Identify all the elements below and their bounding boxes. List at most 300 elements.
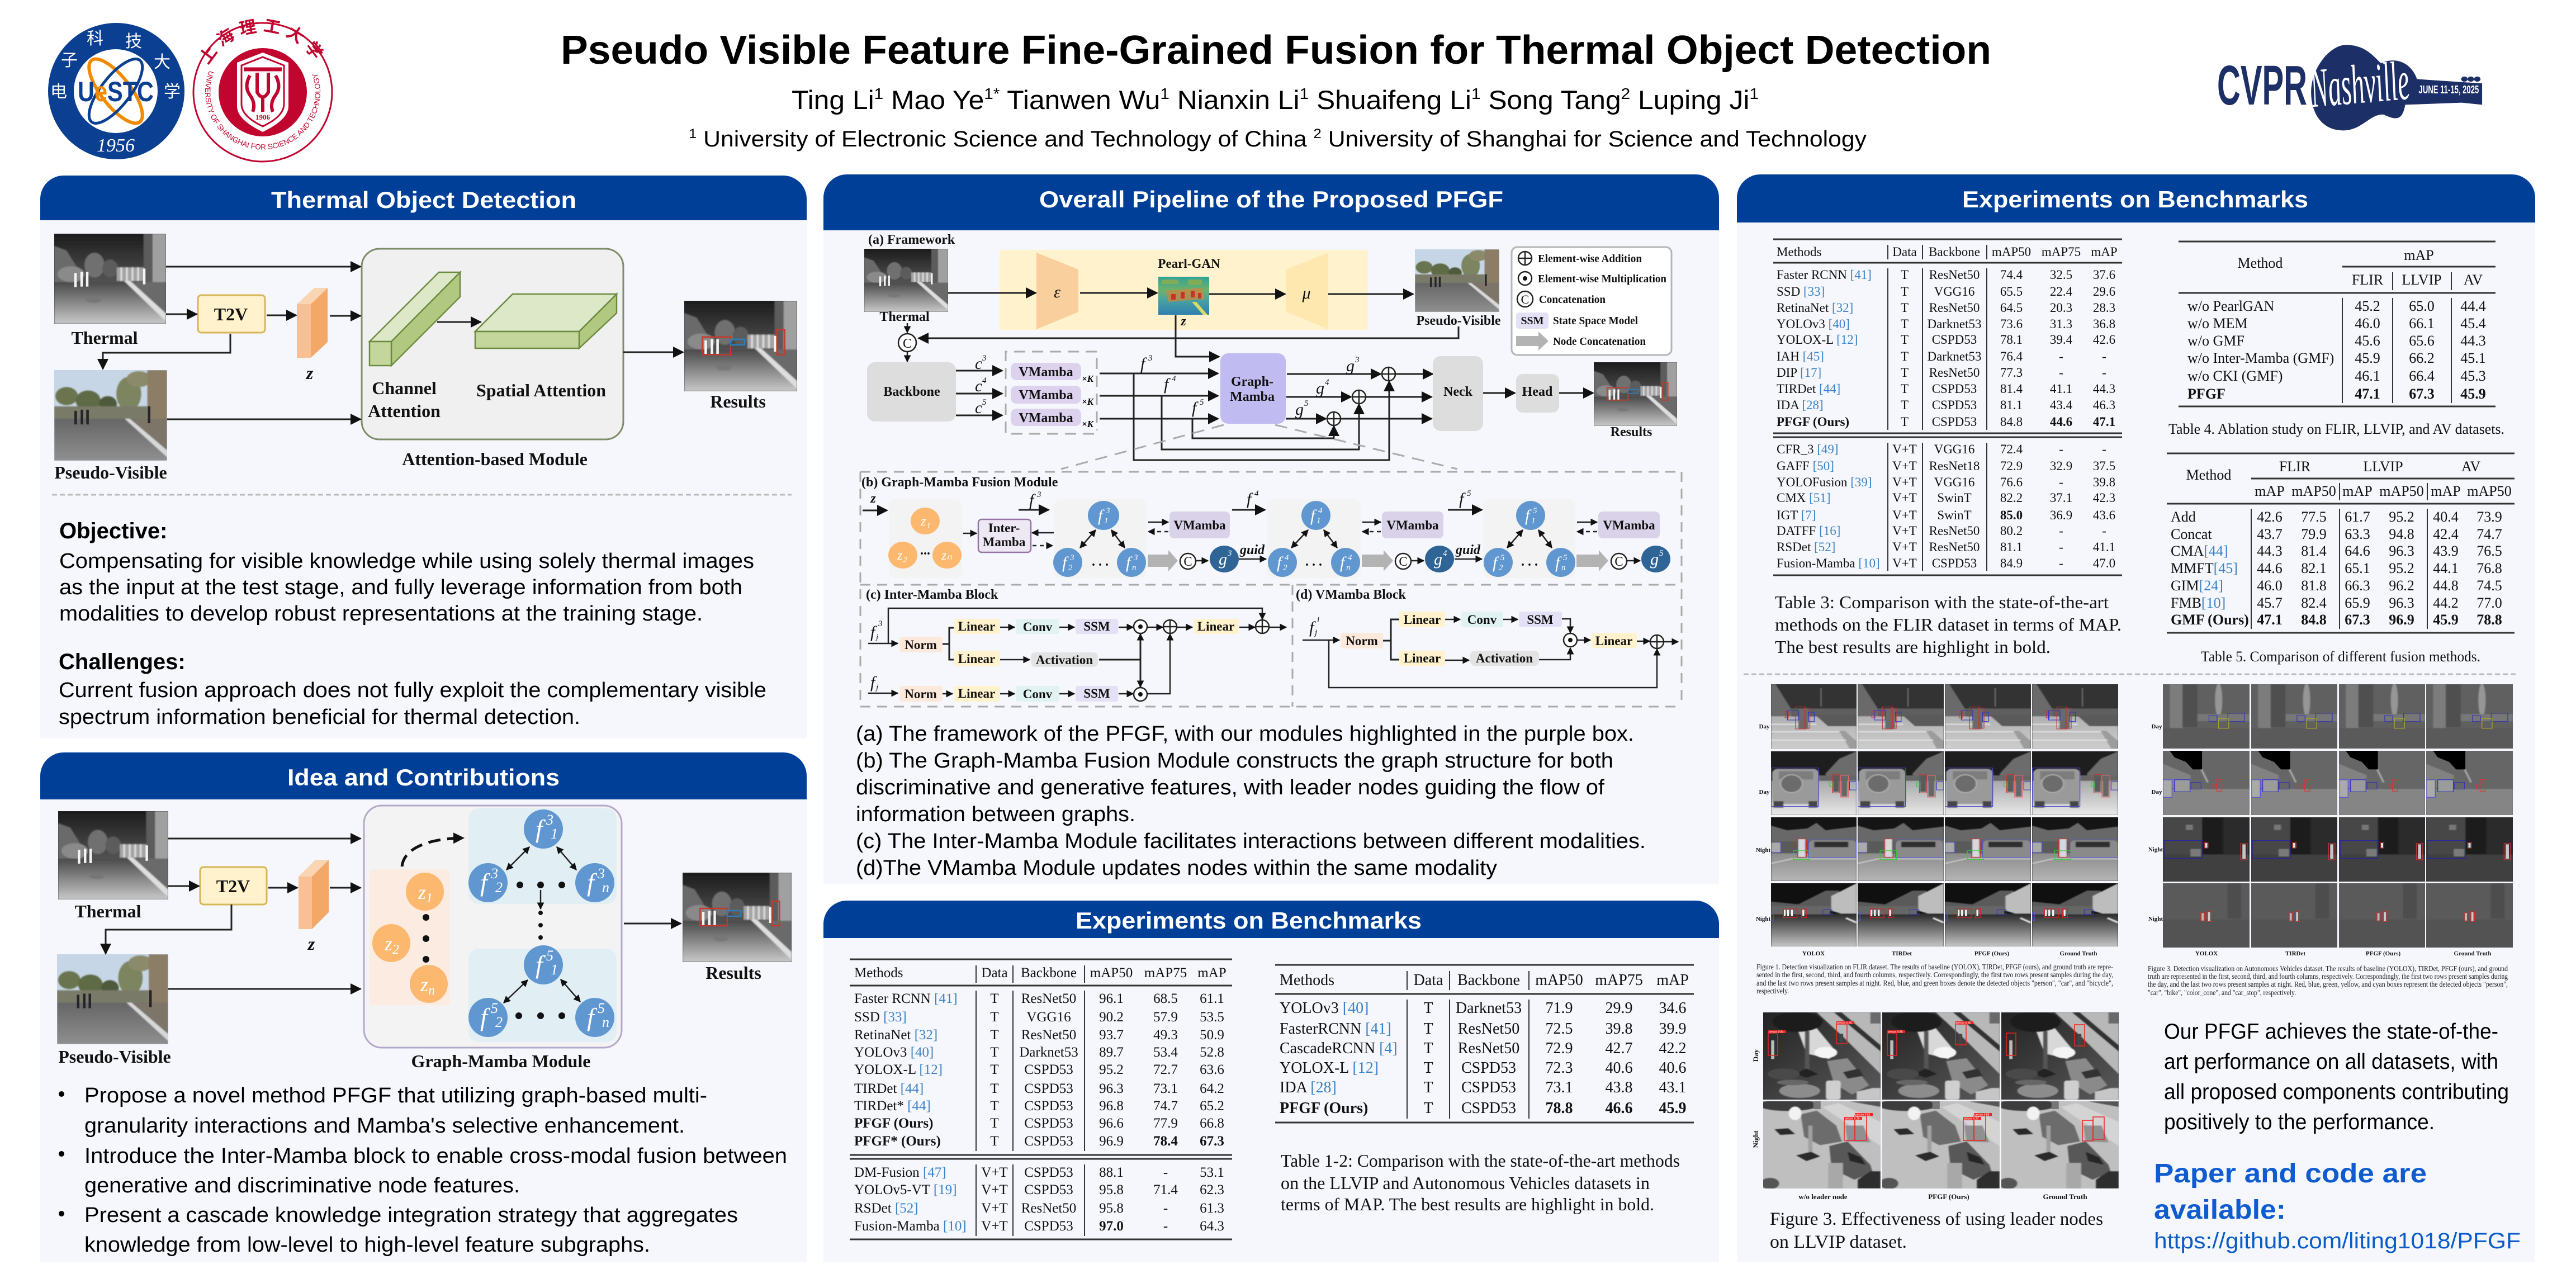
table 3: 81.4 — [2000, 382, 2023, 396]
caption: Autonomous Vehicles figure — [2148, 965, 2508, 997]
table 3: - — [2102, 366, 2106, 380]
head: Head — [1522, 385, 1553, 399]
figure: Autonomous Vehicles detection grid: Day — [2152, 723, 2162, 730]
attention module box — [362, 249, 623, 439]
text block: conclusion: all proposed components contributing — [2164, 1080, 2509, 1104]
graph stage f3: 1 — [1104, 517, 1108, 525]
caption: table 5: Table 5. Comparison of different fusion methods. — [2201, 648, 2480, 665]
diagram: graph-mamba idea: Pseudo-Visible — [58, 1046, 171, 1067]
table 3: PFGF (Ours) — [1777, 415, 1849, 429]
figure: leader node comparison on LLVIP: person 0.76 — [1837, 1022, 1852, 1025]
table 5: 42.4 — [2433, 526, 2459, 542]
table 3: 44.3 — [2093, 382, 2115, 396]
text block: objective: Compensating for visible knowledge while using solely thermal images — [59, 550, 754, 573]
authors: 1* — [984, 85, 1000, 102]
text block: objective: Objective: — [59, 519, 167, 543]
graph stage f4: 4 — [1285, 553, 1289, 562]
lower graph: f — [480, 1003, 491, 1031]
diagram: (d) VMamba Block: Linear — [1404, 651, 1441, 665]
neck: Neck — [1443, 385, 1473, 399]
Graph-Mamba block: Mamba — [1230, 390, 1275, 404]
diagram: (a) framework: c — [975, 377, 982, 395]
table 5: 42.6 — [2257, 509, 2283, 525]
table 5: 95.2 — [2389, 560, 2414, 576]
table 3: TIRDet [44] — [1777, 382, 1840, 396]
caption: table 3 — [1775, 592, 2122, 657]
VMamba stack: ×K — [1082, 396, 1095, 407]
table 1: T — [990, 1010, 999, 1025]
graph stage f3: 3 — [1069, 553, 1074, 562]
table 1: mAP75 — [1144, 965, 1187, 981]
graph stage f4: f — [1277, 553, 1284, 572]
authors: 1 — [1300, 85, 1309, 102]
Inter-Mamba box: Mamba — [983, 535, 1026, 549]
diagram: (a) framework: c — [975, 399, 982, 417]
head — [1516, 374, 1559, 413]
table 2: 40.6 — [1659, 1059, 1686, 1077]
table 2: T — [1423, 1079, 1433, 1096]
table 3: mAP50 — [1992, 245, 2031, 259]
table 2: YOLOX-L [12] — [1280, 1059, 1379, 1077]
table 3: 85.0 — [2000, 508, 2023, 522]
table 1: 90.2 — [1099, 1010, 1124, 1025]
table 5: Method — [2186, 467, 2231, 483]
table 3: - — [2059, 540, 2063, 554]
lower graph: n — [602, 1014, 609, 1030]
VMamba f4 — [1382, 512, 1443, 538]
table 1: 49.3 — [1153, 1027, 1178, 1043]
table 5: 96.2 — [2389, 577, 2414, 594]
legend: SSM — [1521, 315, 1544, 327]
table 4: 45.6 — [2355, 333, 2380, 349]
table 3: Darknet53 — [1927, 349, 1982, 363]
graph stage f5: n — [1561, 564, 1565, 572]
table 1: ResNet50 — [1021, 1201, 1076, 1216]
table 3: 84.8 — [2000, 415, 2023, 429]
table 3: 22.4 — [2050, 285, 2073, 299]
table 2: 46.6 — [1606, 1100, 1632, 1117]
graph stage f3: f — [1062, 553, 1069, 572]
table 1: Faster RCNN [41] — [854, 991, 958, 1006]
table 4: 45.3 — [2460, 368, 2486, 384]
heading: Experiments on Benchmarks — [1737, 174, 2535, 222]
table 3: Fusion-Mamba [10] — [1777, 556, 1880, 570]
figure: leader node comparison on LLVIP: Night — [1751, 1130, 1760, 1148]
table 1: TIRDet [44] — [854, 1081, 924, 1096]
table 2: 73.1 — [1545, 1079, 1573, 1096]
table 5: 79.9 — [2301, 526, 2327, 542]
latent group: z₁ — [920, 514, 931, 529]
attention module box: Spatial Attention — [476, 380, 606, 400]
table 3: T — [1901, 382, 1909, 396]
table 3: Backbone — [1929, 245, 1980, 259]
diagram: graph-mamba idea: Thermal — [74, 901, 141, 921]
table 5: 76.5 — [2476, 543, 2502, 559]
table 3: T — [1901, 415, 1909, 429]
graph stage f5: f — [1493, 553, 1499, 572]
diagram: (a) framework: 4 — [1325, 378, 1329, 387]
table 3: YOLOX-L [12] — [1777, 333, 1858, 347]
table 2: CascadeRCNN [4] — [1280, 1040, 1398, 1057]
lower graph: 5 — [491, 1000, 498, 1016]
table 3: - — [2059, 556, 2063, 570]
text block: challenges: Current fusion approach does not fully exploit the complementary visible — [59, 679, 766, 702]
table 5: 73.9 — [2476, 509, 2502, 525]
channel attention block — [370, 272, 460, 366]
table 1: V+T — [981, 1165, 1008, 1180]
table 3: 81.1 — [2000, 540, 2023, 554]
figure: FLIR detection grid: Ground Truth — [2060, 950, 2097, 957]
heading: Thermal Object Detection — [40, 176, 807, 220]
table 3: 41.1 — [2093, 540, 2115, 554]
table 3: 84.9 — [2000, 556, 2023, 570]
table 3: 72.9 — [2000, 459, 2023, 473]
table 3: 81.1 — [2000, 398, 2023, 412]
table 1: YOLOv3 [40] — [854, 1045, 934, 1060]
heatmap latent — [1158, 277, 1209, 315]
diagram: graph-mamba idea: Results — [705, 963, 761, 983]
table 5: 67.3 — [2345, 612, 2370, 628]
backbone: Backbone — [883, 385, 940, 399]
table 5: GIM[24] — [2171, 577, 2223, 594]
C and g3 — [1180, 546, 1239, 572]
logo: UESTC: 学 — [164, 83, 181, 101]
graph-mamba module — [364, 806, 622, 1048]
table 1: T — [990, 1062, 999, 1077]
table 1: DM-Fusion [47] — [854, 1165, 946, 1180]
table 3: 39.4 — [2050, 333, 2073, 347]
text block: pipeline description — [856, 722, 1646, 880]
figure: leader node comparison on LLVIP: w/o leader node — [1798, 1192, 1848, 1201]
image: results — [684, 301, 797, 391]
table 2: 43.8 — [1606, 1079, 1632, 1096]
logo: UESTC: 子 — [61, 51, 78, 70]
table 4: 45.1 — [2460, 350, 2486, 366]
table 3: 76.4 — [2000, 349, 2023, 363]
attention module box: Attention — [368, 401, 441, 421]
lower graph: 1 — [551, 962, 558, 978]
upper graph — [468, 808, 617, 904]
figure: FLIR detection grid — [1756, 684, 2118, 957]
table 3: 82.2 — [2000, 491, 2023, 505]
table 3: mAP75 — [2042, 245, 2081, 259]
table 1: 88.1 — [1099, 1165, 1124, 1180]
Pearl-GAN region: μ — [1301, 284, 1311, 302]
diagram: (a) framework: f — [1164, 375, 1171, 394]
figure: FLIR detection grid: Day — [1759, 789, 1770, 795]
diagram: (b) Graph-Mamba Fusion Module: f — [1029, 491, 1036, 509]
table 1: 71.4 — [1153, 1182, 1178, 1197]
table 3: CSPD53 — [1932, 556, 1977, 570]
caption: Autonomous Vehicles figure: Figure 3. Detection visualization on Autonomous Vehicles dataset. The results of baseline (YOLOX), TIRDet, PFGF (ours), and ground — [2148, 965, 2508, 973]
diagram: (c) Inter-Mamba Block: Linear — [958, 652, 995, 666]
table 4: 45.9 — [2460, 386, 2486, 402]
table 3: 37.5 — [2093, 459, 2115, 473]
diagram: attention-based pipeline: Results — [710, 391, 766, 411]
table 1: 96.9 — [1099, 1134, 1124, 1149]
diagram: (a) framework: 5 — [1304, 399, 1309, 408]
table 1: ResNet50 — [1021, 1027, 1076, 1043]
diagram: (a) framework: f — [1192, 399, 1199, 417]
graph stage f4 — [1267, 499, 1361, 578]
diagram: (d) VMamba Block: f — [1309, 618, 1316, 637]
diagram: (b) Graph-Mamba Fusion Module: 3 — [1036, 490, 1041, 499]
upper graph: 1 — [551, 826, 558, 842]
table 4: mAP — [2404, 247, 2434, 263]
upper graph: 2 — [495, 879, 503, 896]
table 3: DIP [17] — [1777, 366, 1821, 380]
text block: challenges: Challenges: — [59, 650, 186, 674]
figure: leader node comparison on LLVIP: Ground Truth — [2043, 1192, 2087, 1201]
table 1: CSPD53 — [1024, 1182, 1073, 1197]
table 2: ResNet50 — [1458, 1040, 1519, 1057]
table 3: ResNet50 — [1929, 540, 1980, 554]
text block: pipeline description: (b) The Graph-Mamba Fusion Module constructs the graph structure for both — [856, 749, 1613, 773]
logo: UESTC: 电 — [50, 83, 67, 101]
logo: University of Shanghai for Science and Technology: 上海理工大学 — [200, 19, 324, 65]
table 2: Darknet53 — [1456, 1000, 1522, 1017]
heading: Overall Pipeline: Overall Pipeline of the Proposed PFGF — [1039, 186, 1503, 212]
callout: paper and code link — [2154, 1159, 2521, 1253]
logo: UESTC: 1956 — [97, 135, 135, 156]
table 5: mAP — [2342, 483, 2373, 499]
table 1: CSPD53 — [1024, 1116, 1073, 1131]
table 5: GMF (Ours) — [2171, 612, 2249, 628]
callout: paper and code link: https://github.com/liting1018/PFGF — [2154, 1229, 2521, 1253]
figure: leader node comparison on LLVIP: Day — [1751, 1049, 1760, 1062]
Inter-Mamba box: Inter- — [988, 521, 1020, 535]
callout: paper and code link: available: — [2154, 1195, 2286, 1225]
diagram: (c) Inter-Mamba Block: Conv — [1023, 620, 1053, 634]
image: pseudo-visible — [57, 954, 168, 1044]
C and g5: g — [1650, 550, 1659, 569]
table 1: CSPD53 — [1024, 1134, 1073, 1149]
table 5: 65.1 — [2345, 560, 2370, 576]
table 3: VGG16 — [1934, 442, 1974, 456]
table 2: Data — [1414, 972, 1443, 989]
table 1: 89.7 — [1099, 1045, 1124, 1060]
caption: table 4: Table 4. Ablation study on FLIR, LLVIP, and AV datasets. — [2168, 421, 2504, 437]
figure: leader node comparison on LLVIP: person 0.86 — [1974, 1114, 1990, 1117]
graph stage f3 — [1053, 499, 1147, 578]
caption: FLIR figure — [1756, 963, 2113, 996]
bullet list: contributions: generative and discriminative node features. — [84, 1174, 520, 1197]
orange latent group: n — [428, 983, 435, 998]
diagram: (c) Inter-Mamba Block: Linear — [1197, 619, 1234, 633]
table 3: YOLOFusion [39] — [1777, 475, 1872, 489]
lower graph: 5 — [546, 948, 553, 964]
table 5: 44.2 — [2433, 595, 2459, 611]
table 3: V+T — [1892, 475, 1917, 489]
graph stage f4: f — [1310, 506, 1317, 525]
table 1: 53.4 — [1153, 1045, 1178, 1060]
table 5: 64.6 — [2345, 543, 2370, 559]
table 3: - — [2059, 524, 2063, 538]
table 1: SSD [33] — [854, 1010, 907, 1025]
table 3: T — [1901, 333, 1909, 347]
table 3: SSD [33] — [1777, 285, 1825, 299]
figure: leader node comparison on LLVIP: person 0.79 — [1845, 1117, 1860, 1120]
diagram: (b) Graph-Mamba Fusion Module: f — [1247, 490, 1253, 508]
figure: Autonomous Vehicles detection grid: Ground Truth — [2454, 950, 2491, 957]
table 3: - — [2059, 349, 2063, 363]
logo: UESTC: UeSTC — [78, 76, 154, 107]
table 5: 63.3 — [2345, 526, 2370, 542]
authors: 1 — [1749, 85, 1759, 102]
caption: FLIR figure: and the last two rows present samples at night. Red, blue, and green boxes denote the detected objects "person", "car", and "bicycle", — [1756, 979, 2113, 988]
table 5: 96.3 — [2389, 595, 2414, 611]
latent group — [888, 499, 962, 578]
table 5: mAP50 — [2291, 483, 2336, 499]
figure: FLIR detection grid: TIRDet — [1892, 950, 1912, 957]
diagram: (b) Graph-Mamba Fusion Module: guid — [1239, 543, 1265, 557]
graph stage f3: 3 — [1105, 506, 1110, 515]
table 2: 34.6 — [1659, 1000, 1686, 1017]
table 3: - — [2059, 442, 2063, 456]
diagram: (a) framework: Results — [1611, 425, 1652, 439]
panel: Experiments on Benchmarks (right) — [1737, 174, 2535, 1262]
VMamba stack: VMamba — [1019, 388, 1073, 402]
table 4: 45.2 — [2355, 298, 2380, 314]
diagram: attention-based pipeline: Attention-based Module — [402, 449, 588, 469]
table 3: 72.4 — [2000, 442, 2023, 456]
heading: Idea and Contributions — [40, 752, 807, 799]
diagram: (c) Inter-Mamba Block: SSM — [1083, 619, 1110, 633]
diagram: (a) framework: c — [975, 354, 982, 373]
table 3: CSPD53 — [1932, 415, 1977, 429]
table 5: 44.8 — [2433, 577, 2459, 594]
diagram: (d) VMamba Block: SSM — [1527, 613, 1554, 627]
image: thermal — [864, 249, 948, 312]
table 1: T — [990, 1027, 999, 1043]
table 2: mAP75 — [1595, 972, 1643, 989]
table 1: 67.3 — [1200, 1134, 1224, 1149]
logo: UESTC: 科 — [87, 30, 103, 48]
graph stage f5: 2 — [1499, 564, 1503, 572]
VMamba f5: VMamba — [1603, 518, 1655, 532]
table 1: 57.9 — [1153, 1010, 1178, 1025]
logo: CVPR Nashville: JUNE 11-15, 2025 — [2419, 83, 2479, 96]
table 4: PFGF — [2187, 386, 2225, 402]
table 4: AV — [2464, 272, 2483, 288]
image: pseudo-visible — [54, 370, 167, 461]
caption: FLIR figure: Figure 1. Detection visualization on FLIR dataset. The results of baseline (YOLOX), TIRDet, PFGF (ours), and ground truth are repre- — [1756, 963, 2113, 972]
table 4: 66.1 — [2409, 315, 2435, 332]
table 1: 93.7 — [1099, 1027, 1124, 1043]
panel: Experiments on Benchmarks (middle) — [823, 901, 1719, 1262]
figure: Autonomous Vehicles detection grid: Night — [2148, 846, 2163, 853]
table 1: 72.7 — [1153, 1062, 1178, 1077]
orange latent z: z — [306, 363, 314, 383]
table 3: 42.3 — [2093, 491, 2115, 505]
table 3: 43.4 — [2050, 398, 2073, 412]
table 3: T — [1901, 317, 1909, 331]
table 4: w/o PearlGAN — [2187, 298, 2274, 314]
caption: table 3: The best results are highlight in bold. — [1775, 637, 2051, 657]
image: thermal — [58, 811, 168, 899]
table 4: 65.6 — [2409, 333, 2435, 349]
upper graph: n — [602, 879, 609, 896]
table 1: Backbone — [1021, 965, 1077, 981]
table 3: - — [2059, 475, 2063, 489]
table 3: VGG16 — [1934, 285, 1974, 299]
authors: Shuaifeng Li — [1309, 85, 1471, 115]
diagram: (b) Graph-Mamba Fusion Module: guid — [1455, 543, 1481, 557]
table 4: 45.9 — [2355, 350, 2380, 366]
diagram: attention-based pipeline: Thermal — [71, 328, 138, 348]
figure: leader node comparison on LLVIP: person 0.84 — [1769, 1031, 1784, 1034]
table 3: VGG16 — [1934, 475, 1974, 489]
orange latent group: z — [420, 973, 428, 996]
table 3: V+T — [1892, 556, 1917, 570]
table 3: Faster RCNN [41] — [1777, 268, 1872, 282]
table 2: CSPD53 — [1461, 1100, 1516, 1117]
legend: State Space Model — [1553, 315, 1638, 327]
bullet list: contributions: knowledge from low-level to high-level feature subgraphs. — [84, 1233, 650, 1257]
table 1: - — [1163, 1201, 1168, 1216]
table 2: 78.8 — [1545, 1100, 1573, 1117]
upper graph: f — [536, 815, 546, 843]
table 5: AV — [2461, 458, 2480, 475]
table 1: YOLOv5-VT [19] — [854, 1182, 957, 1197]
table 5: 61.7 — [2345, 509, 2370, 525]
C and g3: g — [1219, 550, 1227, 569]
diagram: (a) framework: 4 — [982, 376, 987, 385]
C and g3: C — [1183, 555, 1192, 569]
diagram: (c) Inter-Mamba Block: 3 — [878, 619, 882, 628]
table 5: 43.7 — [2257, 526, 2283, 542]
diagram: (a) framework: 3 — [1355, 356, 1360, 364]
table 1: CSPD53 — [1024, 1062, 1073, 1077]
latent group: zₙ — [941, 548, 952, 563]
graph stage f4: n — [1346, 564, 1351, 572]
diagram: (a) framework: g — [1316, 379, 1324, 397]
diagram: (c) Inter-Mamba Block: Norm — [905, 687, 937, 701]
spatial attention block — [475, 294, 617, 348]
graph stage f3: n — [1132, 564, 1136, 572]
table 4: 66.2 — [2409, 350, 2435, 366]
table 1: T — [990, 991, 999, 1006]
graph stage f5: . . . — [1521, 555, 1538, 569]
text block: conclusion: positively to the performance. — [2164, 1110, 2435, 1134]
graph stage f3: . . . — [1092, 555, 1109, 569]
table 2: 43.1 — [1659, 1079, 1686, 1096]
table 3: IGT [7] — [1777, 508, 1816, 522]
VMamba stack: ×K — [1082, 419, 1095, 429]
table 2: 71.9 — [1545, 1000, 1573, 1017]
figure: leader node comparison on LLVIP — [1751, 1011, 2119, 1201]
table 3: 39.8 — [2093, 475, 2115, 489]
table 4: 44.3 — [2460, 333, 2486, 349]
caption: FLIR figure: respectively. — [1756, 987, 1789, 996]
figure: FLIR detection grid: Day — [1759, 723, 1770, 730]
table 5: CMA[44] — [2171, 543, 2228, 559]
table 2: Methods — [1280, 972, 1334, 989]
table 5: 84.8 — [2301, 612, 2327, 628]
table 2: 45.9 — [1659, 1100, 1686, 1117]
diagram: (c) Inter-Mamba Block: Linear — [958, 686, 995, 700]
table 1: V+T — [981, 1182, 1008, 1197]
diagram: (a) framework: 3 — [982, 354, 986, 363]
table 2: 39.8 — [1606, 1020, 1632, 1038]
figure: FLIR detection grid: PFGF (Ours) — [1974, 950, 2009, 957]
table 1: 96.3 — [1099, 1081, 1124, 1096]
table 3: 32.9 — [2050, 459, 2072, 473]
diagram: (c) Inter-Mamba Block — [866, 588, 1286, 702]
table 4: 66.4 — [2409, 368, 2435, 384]
text block: objective: modalities to develop robust representations at the training stage. — [59, 602, 703, 626]
caption: table 3: methods on the FLIR dataset in terms of MAP. — [1775, 614, 2122, 634]
